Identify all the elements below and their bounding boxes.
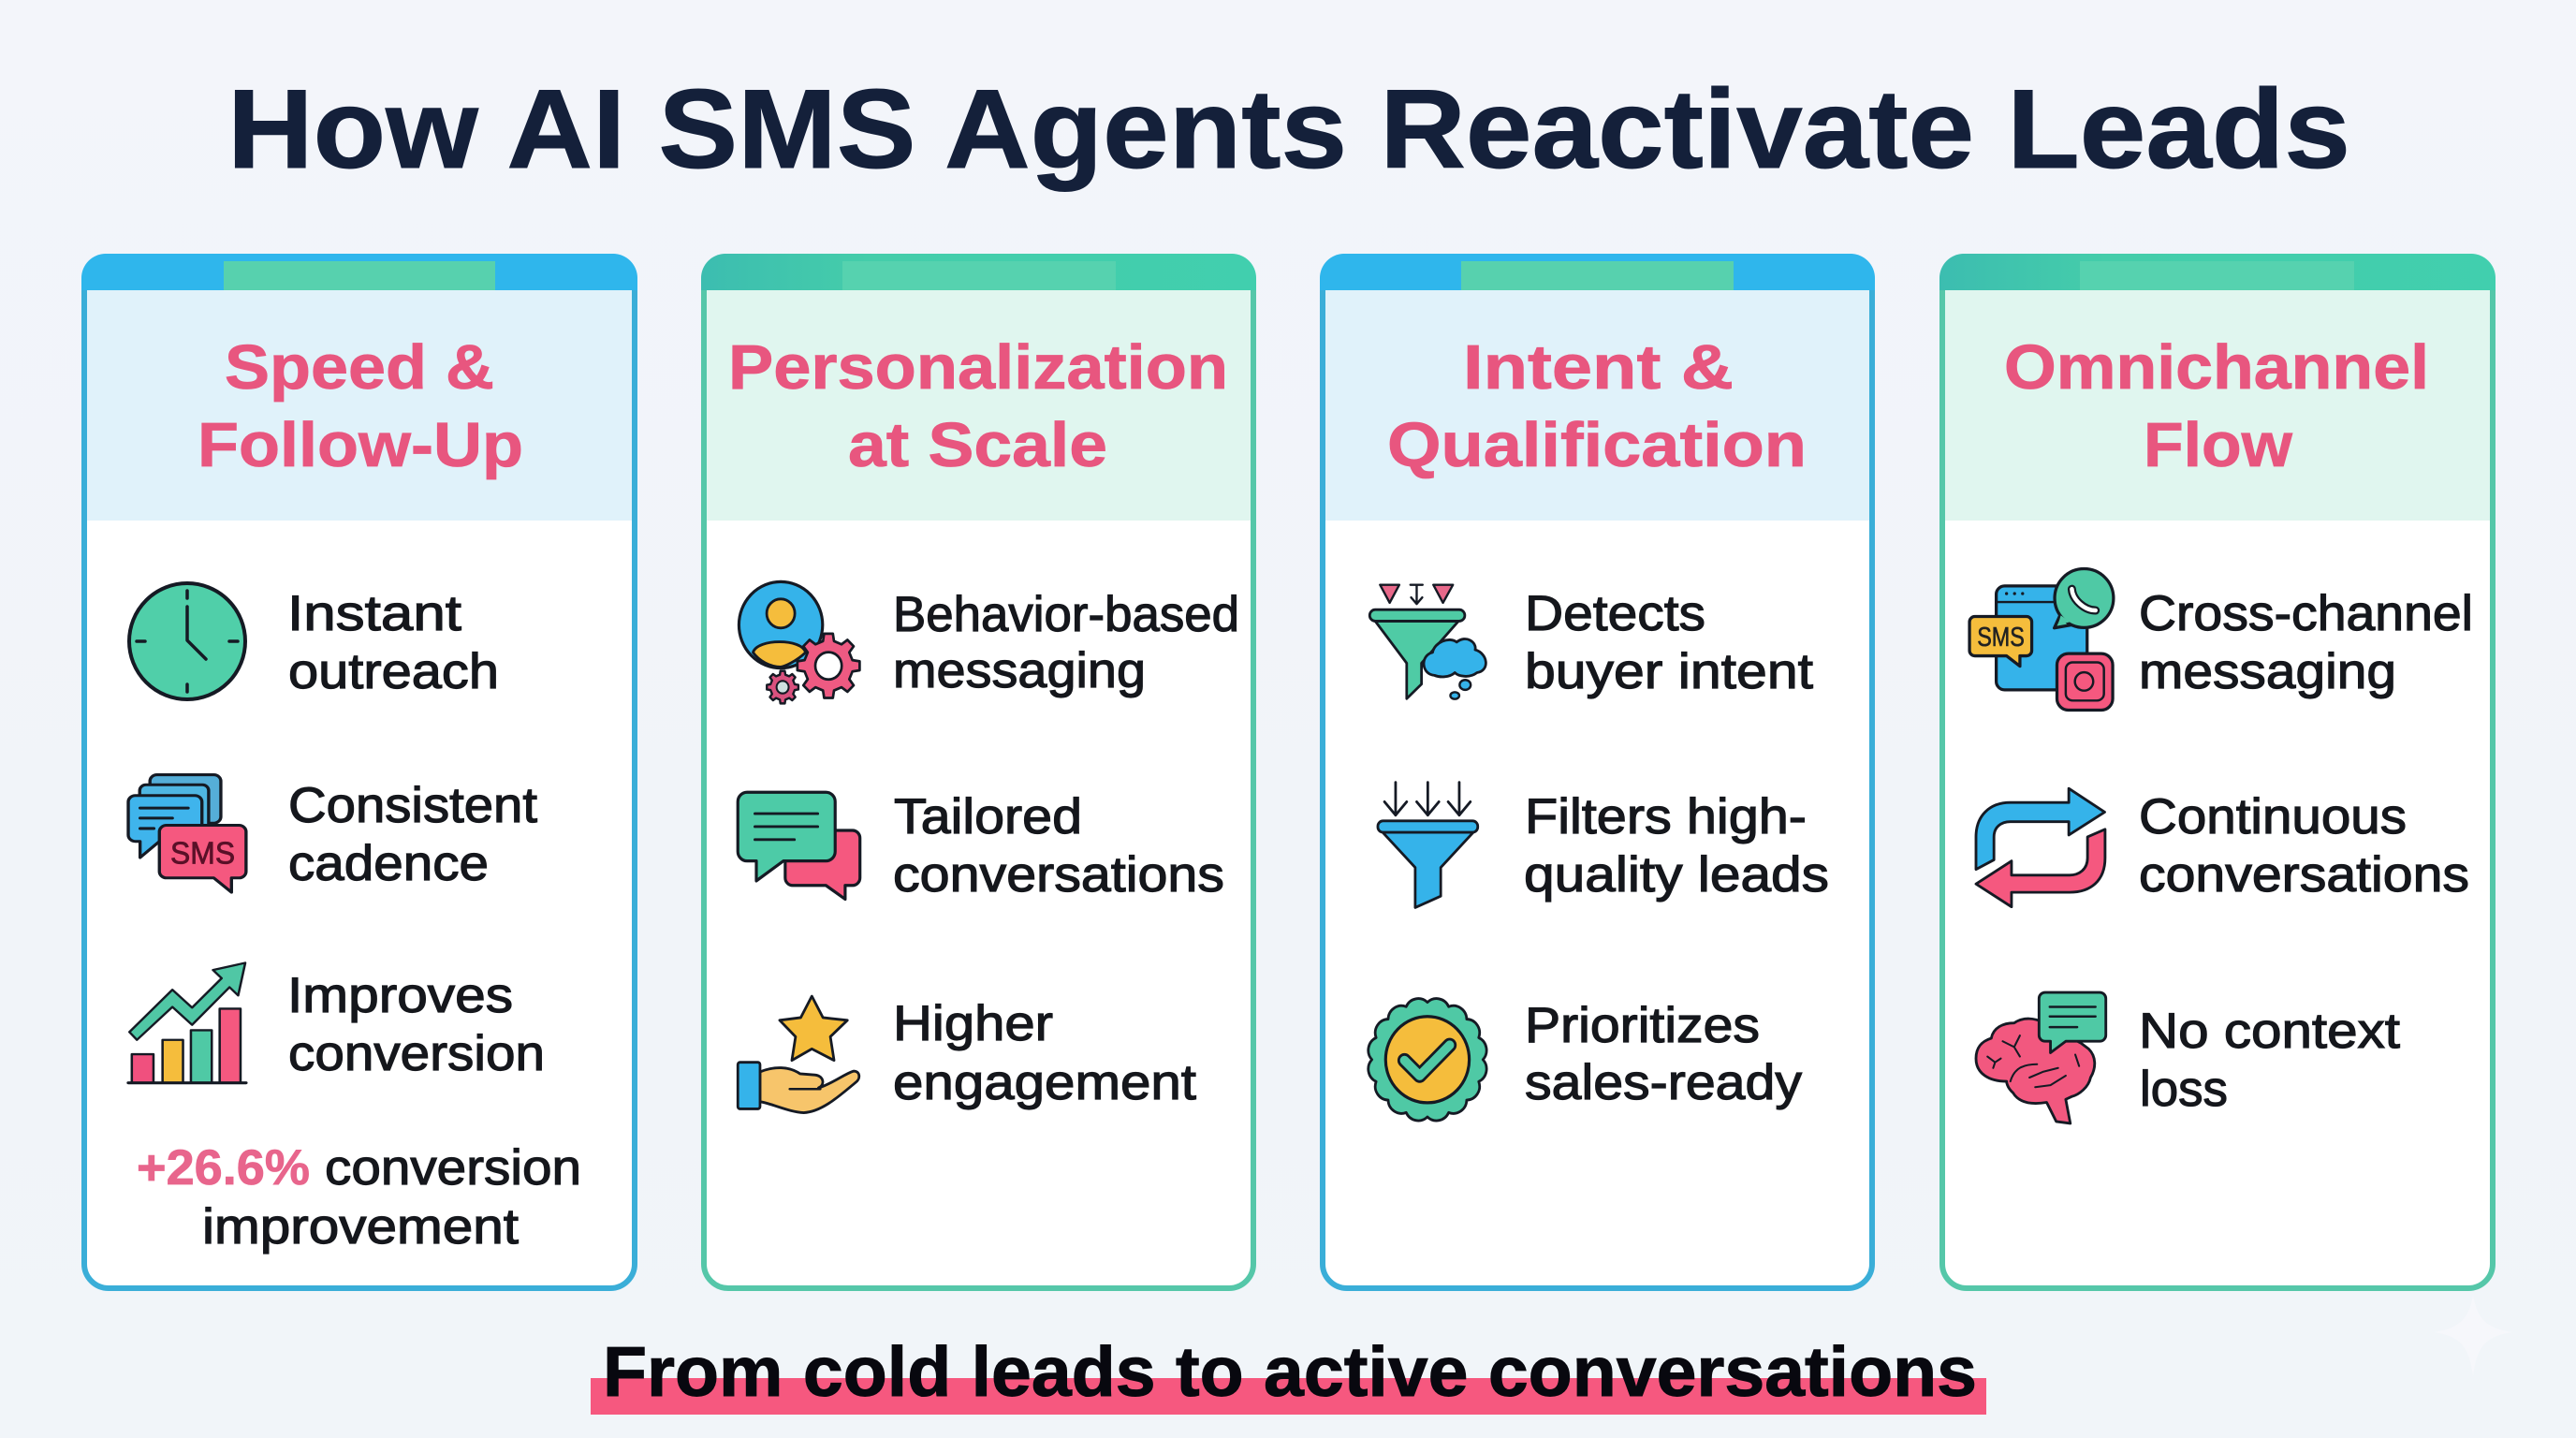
heading: Speed &	[225, 332, 494, 403]
heading: Personalization	[728, 332, 1228, 403]
text: Cross-channel	[2139, 586, 2473, 641]
heading: at Scale	[848, 410, 1107, 480]
heading	[1387, 332, 1807, 480]
card frame	[1939, 254, 2496, 1288]
icon: loop arrows	[1976, 788, 2105, 907]
text: quality leads	[1524, 847, 1829, 902]
panel: Personalization at Scale	[701, 254, 1256, 1288]
tagline with highlight: From cold leads to active conversations	[603, 1332, 1977, 1411]
icon: SMS chat stack: SMS	[170, 837, 235, 871]
text: engagement	[893, 1055, 1196, 1110]
text	[893, 996, 1196, 1110]
item: Consistent cadence	[128, 775, 537, 892]
text: loss	[2140, 1062, 2228, 1117]
icon: channel apps	[1969, 569, 2114, 711]
text	[1524, 789, 1829, 902]
item: Continuous conversations	[1976, 788, 2469, 907]
card frame	[1320, 254, 1875, 1288]
callout: +26.6% conversion improvement: conversion	[325, 1140, 581, 1196]
icon: person with gears	[739, 581, 859, 703]
text: conversations	[2139, 847, 2469, 902]
text: Tailored	[894, 789, 1082, 844]
icon: brain with message	[1976, 992, 2106, 1123]
callout: +26.6% conversion improvement	[137, 1140, 581, 1255]
icon: clock	[129, 583, 245, 699]
text	[287, 968, 545, 1081]
icon: SMS chat stack	[128, 775, 246, 892]
text	[2139, 586, 2473, 699]
icon: funnel with thought cloud	[1369, 585, 1486, 699]
text: Higher	[893, 996, 1053, 1051]
text	[287, 586, 499, 699]
icon: star over hand	[738, 996, 859, 1113]
item: No context loss	[1976, 992, 2400, 1123]
item: Filters high-quality leads	[1378, 783, 1829, 907]
text: messaging	[893, 643, 1146, 698]
text	[893, 789, 1224, 902]
text: Consistent	[288, 778, 537, 833]
text: Improves	[287, 968, 513, 1023]
text: Prioritizes	[1525, 998, 1760, 1053]
text	[2139, 1004, 2400, 1117]
item: Prioritizes sales-ready	[1368, 998, 1803, 1121]
heading	[2004, 332, 2429, 480]
text: conversations	[893, 847, 1224, 902]
item: Tailored conversations	[738, 789, 1224, 902]
panel: Intent & Qualification	[1320, 254, 1875, 1288]
heading: Qualification	[1387, 410, 1807, 480]
text	[1525, 998, 1803, 1110]
panel: Omnichannel Flow	[1939, 254, 2496, 1288]
heading: Omnichannel	[2004, 332, 2429, 403]
heading: Follow-Up	[198, 410, 523, 480]
text: outreach	[288, 644, 499, 699]
heading: Intent &	[1463, 332, 1734, 403]
callout: +26.6% conversion improvement: +26.6%	[137, 1140, 310, 1196]
item: Behavior-based messaging	[739, 581, 1239, 703]
callout: +26.6% conversion improvement: improvement	[202, 1199, 519, 1255]
text	[893, 587, 1239, 698]
item: Detects buyer intent	[1369, 585, 1813, 699]
item: Instant outreach	[129, 583, 499, 699]
icon: check badge	[1368, 999, 1486, 1121]
text: Filters high-	[1525, 789, 1807, 844]
heading	[728, 332, 1228, 480]
item: Higher engagement	[738, 996, 1196, 1113]
text	[288, 778, 537, 891]
text: messaging	[2139, 644, 2396, 699]
text: sales-ready	[1525, 1055, 1803, 1110]
icon: channel apps: SMS	[1977, 623, 2025, 653]
item: Improves conversion	[128, 962, 545, 1083]
title: How AI SMS Agents Reactivate Leads	[227, 66, 2350, 192]
text: cadence	[288, 836, 489, 891]
text: buyer intent	[1525, 644, 1813, 699]
heading: Flow	[2144, 410, 2293, 480]
card frame	[81, 254, 637, 1288]
icon: faint sparkle	[2434, 1295, 2512, 1376]
heading	[198, 332, 523, 480]
text: Instant	[287, 586, 461, 641]
item: Cross-channel messaging	[1969, 569, 2473, 711]
text	[2139, 789, 2469, 902]
icon: chat bubbles	[738, 792, 860, 899]
icon: growth chart	[128, 962, 246, 1083]
text	[1525, 586, 1813, 699]
text: Continuous	[2139, 789, 2407, 844]
card frame	[701, 254, 1256, 1288]
text: No context	[2139, 1004, 2400, 1059]
text: conversion	[288, 1026, 545, 1081]
text: Detects	[1525, 586, 1705, 641]
text: Behavior-based	[893, 587, 1239, 642]
icon: blue funnel with arrows	[1378, 783, 1478, 907]
panel: Speed & Follow-Up	[81, 254, 637, 1288]
